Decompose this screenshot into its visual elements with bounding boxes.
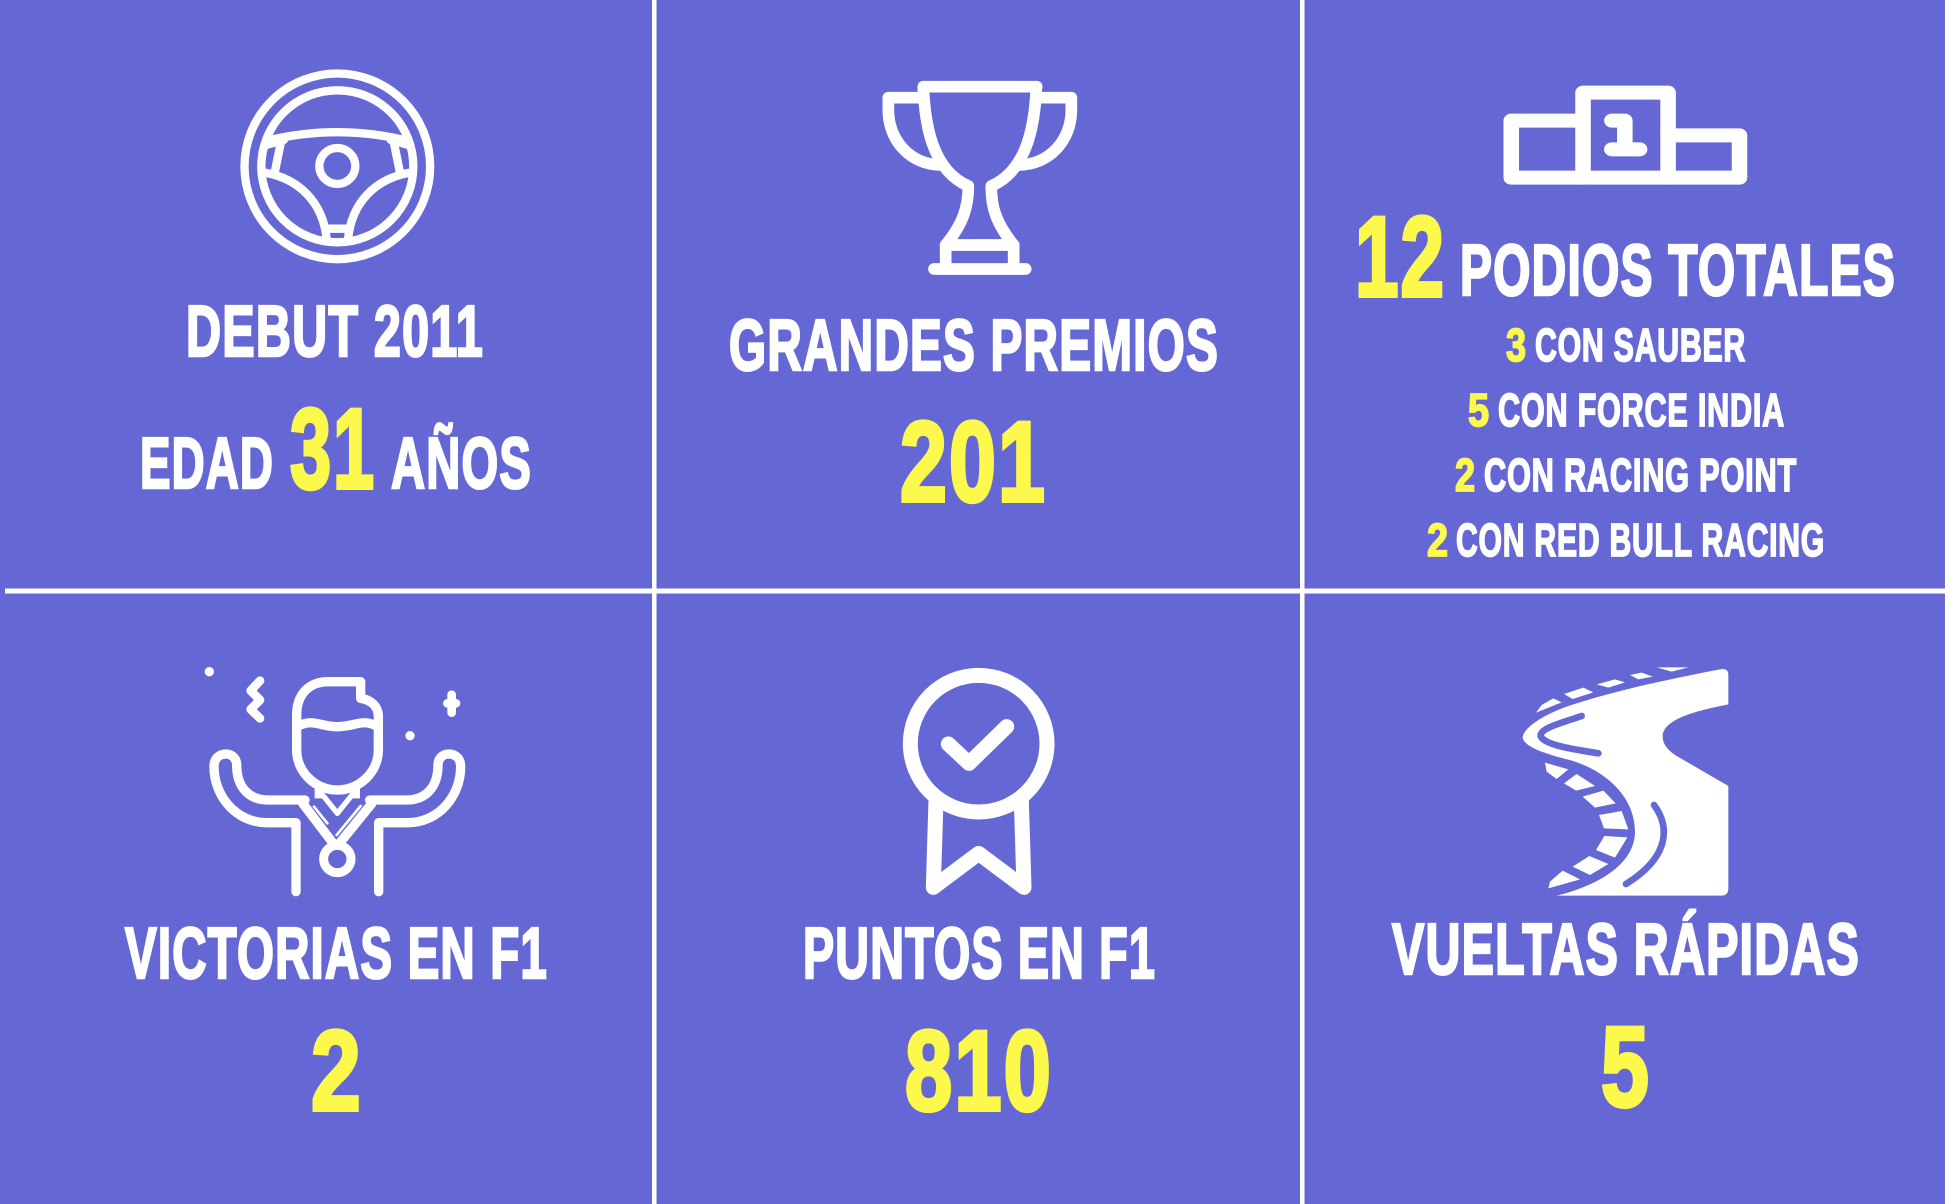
heading: grandes premios: GRANDES PREMIOS [729, 305, 1219, 386]
heading: 12 podios totales [1355, 194, 1896, 321]
panel: debut y edad [140, 73, 532, 513]
icon: steering wheel [244, 73, 430, 259]
list: podios por equipo: 5 [1468, 384, 1490, 436]
heading: debut 2011: DEBUT 2011 [186, 291, 484, 372]
heading: puntos en f1: PUNTOS EN F1 [803, 913, 1156, 994]
list: podios por equipo: 2 [1427, 514, 1449, 566]
icon: driver with medal [205, 667, 461, 892]
panel: grandes premios [729, 87, 1219, 526]
icon: trophy [888, 87, 1071, 269]
list: podios por equipo: CON SAUBER [1535, 319, 1746, 371]
list: podios por equipo: CON FORCE INDIA [1498, 384, 1785, 436]
number: 2: 2 [311, 1008, 363, 1135]
icon: rosette with check [910, 675, 1047, 887]
list: podios por equipo: CON RACING POINT [1484, 449, 1797, 501]
heading: victorias en f1: VICTORIAS EN F1 [125, 913, 548, 994]
panel: victorias [125, 667, 548, 1135]
panel: vueltas rapidas [1392, 667, 1860, 1131]
number: 810: 810 [905, 1008, 1053, 1135]
text: edad 31 años: EDAD [140, 423, 274, 504]
panel: puntos [803, 675, 1156, 1135]
text: edad 31 años [140, 386, 532, 513]
number: 201: 201 [900, 399, 1047, 526]
icon: winding road [1523, 667, 1728, 896]
icon: podium [1511, 93, 1739, 178]
list: podios por equipo [1427, 319, 1825, 566]
list: podios por equipo: 3 [1506, 319, 1527, 371]
number: 5: 5 [1601, 1004, 1651, 1131]
panel: podios [1355, 93, 1896, 566]
list: podios por equipo: 2 [1455, 449, 1476, 501]
text: edad 31 años: AÑOS [391, 423, 532, 504]
text: edad 31 años: 31 [290, 386, 376, 513]
heading: 12 podios totales: 12 [1355, 194, 1446, 321]
